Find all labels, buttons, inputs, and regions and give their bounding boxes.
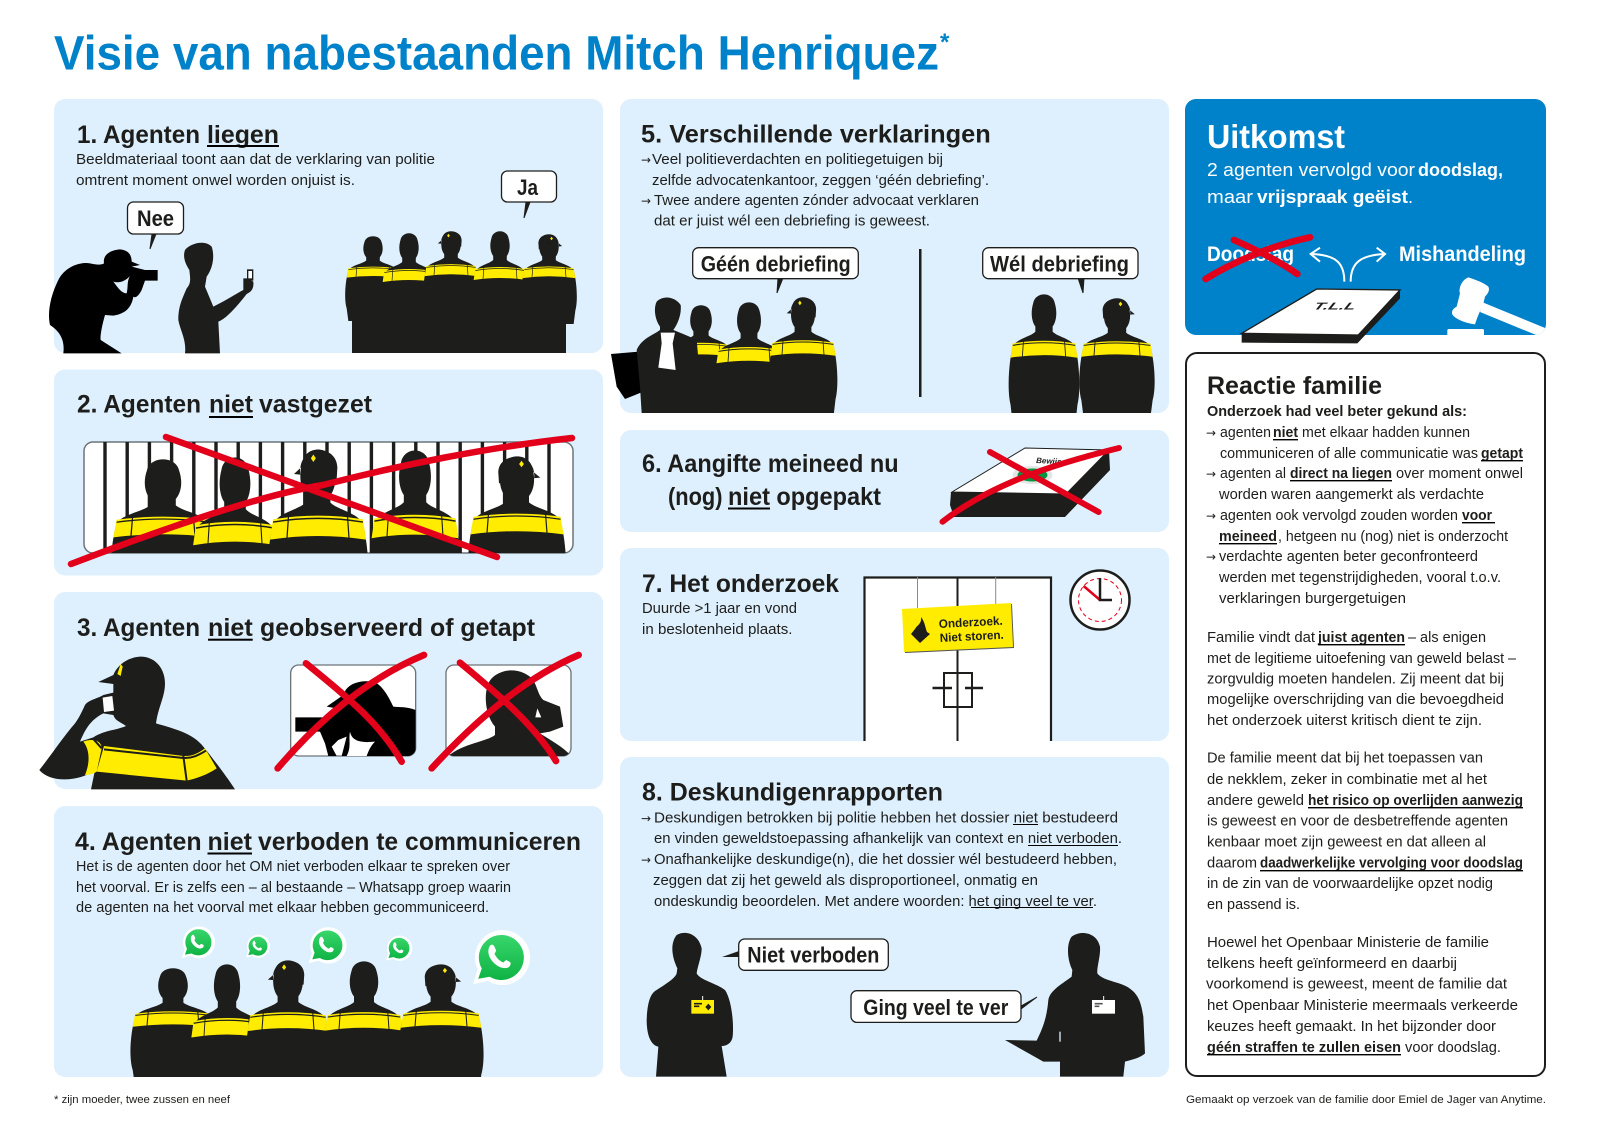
text block: familie vindt: zorgvuldig moeten handelen. Zij meent dat bij (1207, 671, 1504, 688)
text block 8 (641, 809, 1122, 910)
text block 5: Twee andere agenten zónder advocaat verklaren (654, 192, 979, 209)
text block uitkomst: . (1408, 186, 1413, 207)
text block 5 (641, 151, 989, 230)
image: tapped phone call (432, 655, 579, 768)
text block: familie vindt: mogelijke overschrijding van die bevoegdheid (1207, 691, 1504, 708)
text block: de familie meent (1207, 750, 1523, 913)
red cross (71, 437, 572, 564)
heading 1: liegen (207, 121, 279, 149)
group: lawyer and agents (611, 297, 838, 413)
text block uitkomst: maar (1207, 186, 1253, 207)
text block: familie vindt: met de legitieme uitoefening van geweld belast – (1207, 650, 1517, 667)
text block 8: zeggen dat zij het geweld als disproportioneel, onmatig en (653, 872, 1038, 889)
text block: onderzoek had beter gekund: getapt (1481, 445, 1523, 462)
agents group (130, 960, 484, 1077)
text block: onderzoek had beter gekund: worden waren aangemerkt als verdachte (1218, 486, 1484, 503)
panel: 2. agenten niet vastgezet (54, 370, 603, 576)
text block 7 (642, 600, 797, 638)
panel: 6. aangifte meineed (620, 430, 1169, 532)
text block: familie vindt: juist agenten (1317, 629, 1405, 646)
heading reactie: Reactie familie (1207, 372, 1382, 400)
heading 4 (75, 828, 581, 856)
panel: reactie familie (1186, 353, 1545, 1076)
text block 1 (76, 151, 435, 189)
panel: 5. verschillende verklaringen (611, 99, 1169, 427)
icon: law book: T.L.L (1311, 301, 1358, 312)
text block 8: Onafhankelijke deskundige(n), die het dossier wél bestudeerd hebben, (654, 851, 1117, 868)
text block: hoewel: voor doodslag. (1405, 1039, 1501, 1056)
text block: de familie meent: in de zin van de voorwaardelijke opzet nodig (1207, 875, 1493, 892)
text block 8: → (641, 853, 651, 867)
text block: onderzoek had beter gekund: , hetgeen nu (nog) niet is onderzocht (1278, 528, 1509, 545)
text block 4: de agenten na het voorval met elkaar hebben gecommuniceerd. (76, 899, 489, 916)
text block: de familie meent: daarom (1207, 855, 1257, 872)
heading 3: 3. Agenten (77, 614, 200, 642)
divider (919, 249, 922, 397)
text block: onderzoek had beter gekund: agenten al (1220, 465, 1286, 482)
text block: onderzoek had beter gekund: over moment onwel (1396, 465, 1523, 482)
heading 4: niet (208, 828, 253, 856)
panel: 1. agenten liegen (49, 99, 603, 353)
heading 5: 5. Verschillende verklaringen (641, 121, 991, 149)
text block: onderzoek had beter gekund: → (1206, 426, 1216, 440)
figure: expert with yellow badge (647, 933, 733, 1077)
speech bubble: niet verboden (722, 939, 888, 970)
group: two agents (1009, 294, 1155, 424)
heading 8: 8. Deskundigenrapporten (642, 779, 943, 807)
icon: evidence book (942, 448, 1119, 522)
footnote right: Gemaakt op verzoek van de familie door Emiel de Jager van Anytime. (1186, 1094, 1546, 1106)
panel: 4. agenten niet verboden te communiceren (54, 806, 603, 1077)
text block 5: → (641, 194, 651, 208)
text block: onderzoek had beter gekund: → (1206, 550, 1216, 564)
text block 5: Veel politieverdachten en politiegetuigen bij (652, 151, 943, 168)
text block 5: zelfde advocatenkantoor, zeggen ‘géén debriefing’. (652, 172, 989, 189)
speech bubble: ging veel te ver (851, 991, 1037, 1022)
panel: 3. agenten niet geobserveerd of getapt (39, 592, 603, 789)
text block: onderzoek had beter gekund: met elkaar hadden kunnen (1302, 424, 1470, 441)
cell with bars and agents (83, 441, 574, 554)
speech bubble: geen debriefing (693, 248, 858, 293)
text block: de familie meent: de nekklem, zeker in combinatie met al het (1207, 771, 1488, 788)
text block: onderzoek had beter gekund: voor (1462, 507, 1492, 524)
text block: familie vindt: het onderzoek uiterst kritisch dient te zijn. (1207, 712, 1482, 729)
text block 7: Duurde >1 jaar en vond (642, 600, 797, 617)
text block: de familie meent: andere geweld (1207, 792, 1304, 809)
speech bubble: wel debriefing (983, 248, 1138, 293)
title: Visie van nabestaanden Mitch Henriquez (54, 28, 939, 80)
text block: onderzoek had beter gekund: verdachte agenten beter geconfronteerd (1219, 548, 1478, 565)
speech bubble: wel debriefing: Wél debriefing (990, 252, 1129, 277)
heading 6: opgepakt (776, 483, 882, 511)
heading 3 (77, 614, 536, 642)
text block: de familie meent: is geweest en voor de desbetreffende agenten (1207, 813, 1508, 830)
icon: door with sign: Niet storen. (939, 628, 1004, 645)
text block 4: Het is de agenten door het OM niet verboden elkaar te spreken over (76, 858, 510, 875)
heading 6: niet (728, 483, 771, 511)
heading 4: 4. Agenten (75, 828, 202, 856)
icon: door with sign: Onderzoek. (938, 614, 1003, 631)
heading 2: vastgezet (259, 391, 373, 419)
text block: familie vindt: Familie vindt dat (1207, 629, 1316, 646)
text block: onderzoek had beter gekund: → (1206, 509, 1216, 523)
text block: de familie meent: kenbaar moet zijn geweest en dat alleen al (1207, 834, 1486, 851)
icon: person with phone (178, 243, 253, 353)
text block: de familie meent: en passend is. (1207, 896, 1300, 913)
panel: 7. het onderzoek (620, 548, 1169, 741)
text block 8: ondeskundig beoordelen. Met andere woorden: het ging veel te ver. (654, 893, 1097, 910)
speech bubble: Ja (502, 171, 556, 218)
icon: clock (1070, 570, 1130, 630)
text block: onderzoek had beter gekund: werden met tegenstrijdigheden, vooral t.o.v. (1218, 569, 1501, 586)
text block: onderzoek had beter gekund: niet (1273, 424, 1298, 441)
icon: law book (1242, 289, 1400, 343)
text block 8: → (641, 811, 651, 825)
text block 4 (76, 858, 511, 916)
agents group (345, 231, 577, 353)
icon: photographer (49, 249, 158, 353)
text block: hoewel: telkens heeft geïnformeerd en daarbij (1207, 955, 1457, 972)
panel: uitkomst (1185, 99, 1552, 343)
text block: onderzoek had beter gekund: direct na liegen (1290, 465, 1392, 482)
speech bubble: Nee (128, 202, 184, 249)
heading uitkomst: Uitkomst (1207, 118, 1345, 155)
text block: onderzoek had beter gekund: → (1206, 467, 1216, 481)
text block 5: → (641, 153, 651, 167)
heading 2: 2. Agenten (77, 391, 201, 419)
icon: agent on phone (39, 657, 235, 789)
heading 6: 6. Aangifte meineed nu (642, 450, 899, 478)
text block: hoewel: géén straffen te zullen eisen (1207, 1039, 1401, 1056)
text block: onderzoek had beter gekund: agenten ook vervolgd zouden worden (1220, 507, 1458, 524)
panel: 8. deskundigenrapporten (620, 757, 1169, 1077)
footnote left: * zijn moeder, twee zussen en neef (54, 1094, 231, 1106)
text block: hoewel: het Openbaar Ministerie meermaals verkeerde (1207, 997, 1518, 1014)
icon: evidence book: Bewijs (1036, 456, 1062, 466)
text block uitkomst: 2 agenten vervolgd voor (1207, 159, 1415, 180)
label: mishandeling: Mishandeling (1399, 243, 1526, 266)
text block: familie vindt: – als enigen (1408, 629, 1486, 646)
text block: hoewel: keuzes heeft gemaakt. In het bijzonder door (1207, 1018, 1496, 1035)
text block uitkomst: vrijspraak geëist (1257, 186, 1408, 207)
label: doodslag crossed: Doodslag (1207, 243, 1294, 266)
text block 8: Deskundigen betrokken bij politie hebben het dossier niet bestudeerd (654, 809, 1118, 826)
icon: gavel (1447, 277, 1546, 335)
heading 3: niet (208, 614, 253, 642)
text block: de familie meent: daadwerkelijke vervolging voor doodslag (1260, 855, 1523, 872)
text block: onderzoek had beter gekund: Onderzoek had veel beter gekund als: (1207, 403, 1467, 420)
text block uitkomst: doodslag, (1418, 159, 1503, 180)
title: * (940, 29, 950, 56)
text block: hoewel: voorkomend is geweest, meent de familie dat (1206, 976, 1508, 992)
heading 6 (642, 450, 899, 511)
text block: de familie meent: De familie meent dat bij het toepassen van (1207, 750, 1483, 767)
label: doodslag crossed (1206, 237, 1310, 279)
text block: hoewel: Hoewel het Openbaar Ministerie de familie (1207, 934, 1489, 951)
speech bubble: Ja: Ja (517, 175, 539, 200)
heading 4: verboden te communiceren (258, 828, 581, 856)
figure: expert with clipboard (1005, 933, 1145, 1077)
text block: onderzoek had beter gekund (1206, 403, 1523, 607)
icon: door with sign (864, 577, 1051, 741)
text block 1: omtrent moment onwel worden onjuist is. (76, 172, 355, 189)
text block 8: en vinden geweldstoepassing afhankelijk van context en niet verboden. (654, 830, 1122, 847)
text block: familie vindt (1207, 629, 1517, 729)
icons: whatsapp (182, 926, 530, 985)
heading 3: geobserveerd of getapt (260, 614, 536, 642)
text block 1: Beeldmateriaal toont aan dat de verklaring van politie (76, 151, 435, 168)
heading 7: 7. Het onderzoek (642, 570, 839, 598)
heading 1 (77, 121, 279, 149)
text block: onderzoek had beter gekund: meineed (1219, 528, 1277, 545)
speech bubble: Nee: Nee (137, 206, 174, 231)
text block: onderzoek had beter gekund: communiceren of alle communicatie was (1220, 445, 1478, 462)
text block 4: het voorval. Er is zelfs een – al bestaande – Whatsapp groep waarin (76, 879, 511, 896)
text block 5: dat er juist wél een debriefing is geweest. (654, 213, 930, 230)
speech bubble: geen debriefing: Géén debriefing (701, 252, 851, 277)
text block: onderzoek had beter gekund: agenten (1220, 424, 1271, 441)
heading 2 (77, 391, 373, 419)
text block: hoewel (1206, 934, 1518, 1056)
text block 7: in beslotenheid plaats. (642, 621, 792, 638)
heading 6: (nog) (668, 483, 722, 511)
speech bubble: niet verboden: Niet verboden (747, 943, 879, 968)
arrows (1311, 248, 1385, 282)
image: observed photographer (278, 655, 424, 768)
text block: de familie meent: het risico op overlijden aanwezig (1308, 792, 1523, 809)
text block: onderzoek had beter gekund: verklaringen burgergetuigen (1219, 590, 1406, 607)
heading 1: 1. Agenten (77, 121, 200, 149)
heading 2: niet (209, 391, 254, 419)
speech bubble: ging veel te ver: Ging veel te ver (863, 995, 1009, 1020)
text block uitkomst (1207, 159, 1503, 207)
